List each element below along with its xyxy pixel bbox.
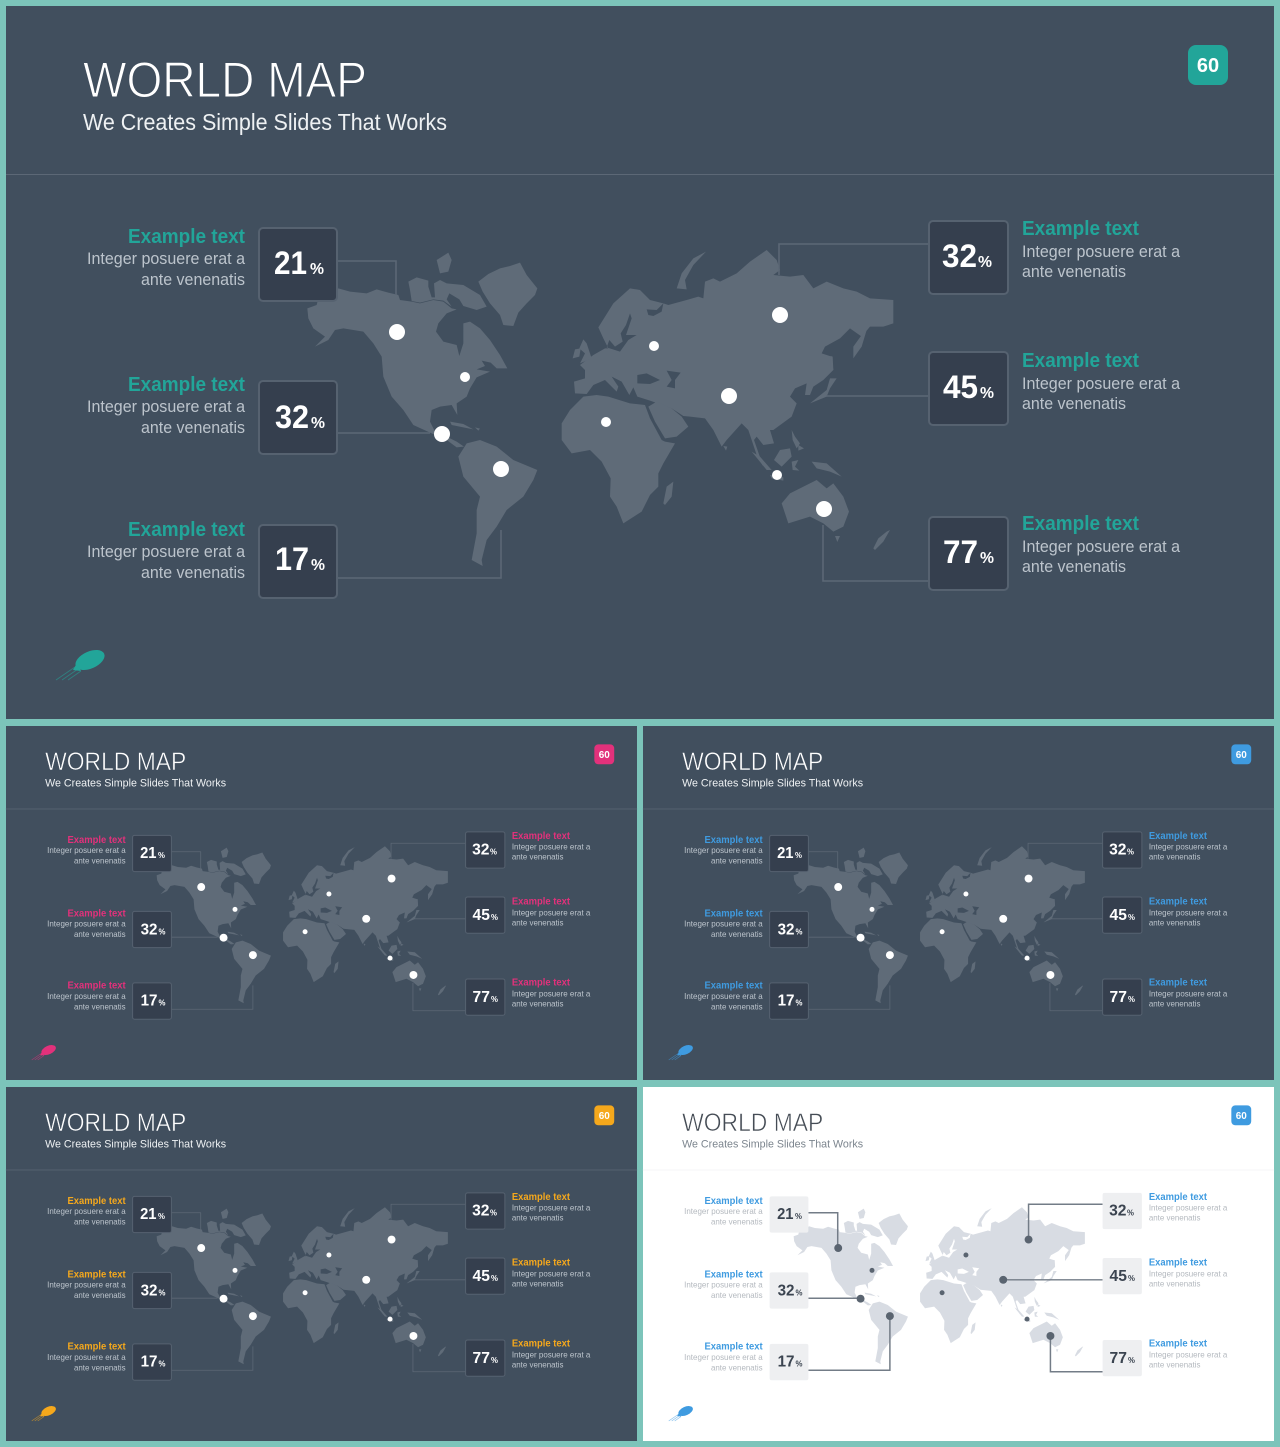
callout: left 32%: ante venenatis: [74, 929, 126, 939]
callout: right 32%: Integer posuere erat a: [512, 1203, 591, 1213]
callout: left 32%: 32: [778, 1283, 795, 1300]
callout: left 21%: %: [795, 1212, 802, 1221]
callout: right 77%: [929, 513, 1181, 590]
callout: right 77%: Integer posuere erat a: [1022, 537, 1181, 556]
callout: right 32%: [1103, 831, 1228, 868]
map location dots: [389, 307, 832, 517]
callout: right 77%: Example text: [1149, 977, 1208, 988]
callout: left 32%: [684, 908, 808, 948]
callout: left 32%: 32: [141, 1283, 158, 1300]
callout: left 32%: %: [158, 1289, 165, 1298]
callout: right 45%: [1103, 896, 1228, 933]
panel: blue slide: [643, 726, 1274, 1080]
callout: right 45%: [1103, 1257, 1228, 1294]
panel: main teal slide: [6, 6, 1274, 719]
callout: left 32%: [684, 1269, 808, 1309]
panel: orange slide: [6, 1087, 637, 1441]
callout: left 17%: Integer posuere erat a: [684, 991, 763, 1001]
callout: left 21%: 21: [274, 245, 307, 281]
callout: right 77%: Integer posuere erat a: [512, 988, 591, 998]
callout: right 45%: 45: [1110, 907, 1127, 924]
callout: right 32%: Integer posuere erat a: [1149, 842, 1228, 852]
callout: left 32%: Integer posuere erat a: [684, 1280, 763, 1290]
callout: left 17%: Example text: [128, 519, 245, 541]
badge: page number: [1231, 744, 1251, 764]
callout: right 45%: Example text: [1149, 896, 1208, 907]
callout: right 45%: ante venenatis: [512, 1278, 564, 1288]
callout: left 17%: Example text: [705, 980, 763, 991]
map location dots: [834, 875, 1054, 979]
callout: right 45%: 45: [473, 907, 490, 924]
callout: right 45%: Integer posuere erat a: [1149, 1268, 1228, 1278]
title: WORLD MAP: [83, 52, 367, 108]
callout: right 32%: ante venenatis: [1149, 852, 1201, 862]
callout: right 32%: 32: [1109, 1203, 1127, 1220]
callout: left 17%: Integer posuere erat a: [47, 1352, 126, 1362]
callout: left 17%: %: [795, 998, 802, 1007]
callout: left 17%: 17: [778, 1353, 795, 1370]
callout: left 32%: 32: [275, 399, 309, 435]
connector lines: [808, 1204, 1103, 1372]
callout: right 77%: Integer posuere erat a: [1149, 1349, 1228, 1359]
callout: right 45%: %: [980, 385, 994, 402]
callout: right 32%: Example text: [512, 1192, 571, 1203]
callout: left 17%: ante venenatis: [711, 1001, 763, 1011]
connector lines: [808, 843, 1103, 1011]
callout: left 17%: [87, 519, 337, 598]
callout: left 17%: 17: [275, 541, 309, 577]
callout: right 77%: [466, 1338, 591, 1376]
callout: right 77%: Example text: [512, 977, 571, 988]
callout: right 45%: Integer posuere erat a: [512, 907, 591, 917]
callout: right 77%: [466, 977, 591, 1015]
callout: left 21%: Integer posuere erat a: [47, 845, 126, 855]
callout: right 32%: %: [978, 254, 992, 271]
world map: [157, 846, 448, 1003]
callout: right 45%: ante venenatis: [1149, 917, 1201, 927]
callout: right 45%: [466, 1257, 591, 1294]
callout: right 77%: ante venenatis: [1149, 998, 1201, 1008]
map location dots: [197, 1236, 417, 1340]
callout: left 21%: %: [158, 1212, 165, 1221]
callout: right 32%: ante venenatis: [512, 1213, 564, 1223]
panel: pink slide: [6, 726, 637, 1080]
subtitle: We Creates Simple Slides That Works: [83, 109, 447, 135]
callout: left 32%: [87, 374, 337, 454]
icon: rocket: [32, 1043, 57, 1060]
callout: right 45%: Integer posuere erat a: [1022, 374, 1181, 393]
callout: left 21%: [684, 835, 808, 872]
title: WORLD MAP: [45, 749, 186, 776]
callout: right 77%: %: [1128, 995, 1135, 1004]
badge: page number: 60: [1197, 55, 1219, 77]
callout: right 77%: 77: [943, 534, 978, 570]
callout: left 17%: 17: [141, 992, 158, 1009]
callout: right 32%: Example text: [512, 831, 571, 842]
callout: left 21%: ante venenatis: [74, 1217, 126, 1227]
callout: left 21%: Example text: [128, 226, 245, 248]
callout: right 32%: [1103, 1192, 1228, 1229]
callout: right 32%: ante venenatis: [512, 852, 564, 862]
callout: left 17%: Example text: [68, 980, 126, 991]
subtitle: We Creates Simple Slides That Works: [682, 1139, 863, 1151]
callout: left 21%: 21: [777, 1206, 794, 1223]
map location dots: [834, 1236, 1054, 1340]
callout: right 32%: Example text: [1022, 218, 1139, 240]
callout: left 32%: Example text: [128, 374, 245, 396]
world map: [307, 250, 893, 566]
callout: left 32%: %: [795, 1289, 802, 1298]
callout: right 45%: ante venenatis: [512, 917, 564, 927]
callout: left 32%: Example text: [68, 1269, 126, 1280]
callout: right 77%: [1103, 977, 1228, 1015]
badge: page number: [594, 1105, 614, 1125]
callout: left 32%: Example text: [68, 908, 126, 919]
callout: left 21%: ante venenatis: [711, 1217, 763, 1227]
subtitle: We Creates Simple Slides That Works: [45, 1139, 226, 1151]
callout: left 32%: ante venenatis: [141, 418, 245, 437]
callout: right 32%: Example text: [1149, 1192, 1208, 1203]
badge: page number: [594, 744, 614, 764]
callout: right 32%: %: [490, 848, 497, 857]
callout: right 77%: 77: [473, 989, 490, 1006]
callout: left 17%: [684, 980, 808, 1019]
badge: page number: [1231, 1105, 1251, 1125]
callout: left 21%: Integer posuere erat a: [684, 845, 763, 855]
callout: right 32%: 32: [942, 238, 977, 274]
subtitle: We Creates Simple Slides That Works: [45, 778, 226, 790]
callout: right 77%: ante venenatis: [1149, 1359, 1201, 1369]
connector lines: [171, 1204, 466, 1372]
callout: right 45%: 45: [943, 369, 978, 405]
callout: left 21%: Example text: [68, 1196, 126, 1207]
callout: right 45%: Example text: [1022, 350, 1139, 372]
callout: left 21%: %: [795, 851, 802, 860]
callout: right 32%: %: [1127, 1209, 1134, 1218]
callout: left 32%: %: [311, 415, 325, 432]
callout: left 17%: %: [795, 1359, 802, 1368]
callout: right 32%: ante venenatis: [1022, 262, 1126, 281]
callout: left 32%: Integer posuere erat a: [47, 1280, 126, 1290]
callout: right 32%: %: [1127, 848, 1134, 857]
callout: right 77%: Example text: [1022, 513, 1139, 535]
callout: left 17%: ante venenatis: [74, 1362, 126, 1372]
title: WORLD MAP: [45, 1110, 186, 1137]
callout: left 21%: Integer posuere erat a: [684, 1206, 763, 1216]
callout: right 45%: 45: [473, 1268, 490, 1285]
callout: right 45%: Example text: [512, 1257, 571, 1268]
callout: right 77%: ante venenatis: [1022, 557, 1126, 576]
callout: right 32%: Example text: [1149, 831, 1208, 842]
callout: right 45%: %: [1128, 1274, 1135, 1283]
badge: page number: 60: [599, 750, 610, 761]
callout: left 32%: Integer posuere erat a: [47, 919, 126, 929]
callout: left 32%: ante venenatis: [711, 1290, 763, 1300]
callout: left 32%: 32: [141, 922, 158, 939]
callout: left 17%: 17: [778, 992, 795, 1009]
icon: rocket: [32, 1404, 57, 1421]
callout: left 21%: %: [310, 261, 324, 278]
callout: right 45%: ante venenatis: [1149, 1278, 1201, 1288]
world map: [794, 846, 1085, 1003]
callout: right 45%: %: [491, 1274, 498, 1283]
callout: right 77%: Example text: [1149, 1338, 1208, 1349]
callout: right 77%: %: [491, 1356, 498, 1365]
callout: left 21%: [684, 1196, 808, 1233]
callout: left 17%: [684, 1341, 808, 1380]
callout: left 32%: %: [158, 928, 165, 937]
callout: right 32%: [466, 1192, 591, 1229]
callout: left 17%: %: [158, 998, 165, 1007]
callout: right 45%: %: [1128, 913, 1135, 922]
callout: left 21%: Integer posuere erat a: [47, 1206, 126, 1216]
callout: left 32%: Example text: [705, 908, 763, 919]
callout: left 17%: ante venenatis: [141, 563, 245, 582]
callout: left 21%: Example text: [705, 835, 763, 846]
callout: left 17%: Example text: [68, 1341, 126, 1352]
callout: right 45%: Integer posuere erat a: [1149, 907, 1228, 917]
callout: left 32%: %: [795, 928, 802, 937]
callout: right 32%: 32: [472, 1203, 490, 1220]
callout: left 32%: Example text: [705, 1269, 763, 1280]
callout: left 17%: Integer posuere erat a: [684, 1352, 763, 1362]
badge: page number: 60: [1236, 750, 1247, 761]
map location dots: [197, 875, 417, 979]
callout: left 21%: 21: [140, 845, 157, 862]
callout: right 77%: %: [1128, 1356, 1135, 1365]
panel: white slide: [643, 1087, 1274, 1441]
callout: left 32%: Integer posuere erat a: [87, 397, 246, 416]
callout: left 21%: Integer posuere erat a: [87, 249, 246, 268]
callout: right 32%: 32: [1109, 842, 1127, 859]
title: WORLD MAP: [682, 749, 823, 776]
callout: left 32%: 32: [778, 922, 795, 939]
callout: right 32%: [466, 831, 591, 868]
world map: [157, 1207, 448, 1364]
callout: right 32%: %: [490, 1209, 497, 1218]
connector lines: [171, 843, 466, 1011]
callout: left 21%: Example text: [68, 835, 126, 846]
callout: right 32%: ante venenatis: [1149, 1213, 1201, 1223]
callout: right 45%: Integer posuere erat a: [512, 1268, 591, 1278]
badge: page number: 60: [1236, 1111, 1247, 1122]
callout: left 17%: [47, 980, 171, 1019]
callout: left 32%: Integer posuere erat a: [684, 919, 763, 929]
callout: left 21%: Example text: [705, 1196, 763, 1207]
callout: right 32%: Integer posuere erat a: [1022, 242, 1181, 261]
badge: page number: [1188, 45, 1228, 85]
callout: right 45%: ante venenatis: [1022, 394, 1126, 413]
callout: left 32%: [47, 1269, 171, 1309]
callout: left 17%: Integer posuere erat a: [87, 542, 246, 561]
callout: left 21%: 21: [140, 1206, 157, 1223]
callout: right 77%: ante venenatis: [512, 998, 564, 1008]
callout: right 45%: [929, 350, 1181, 425]
connector lines: [337, 244, 929, 581]
callout: right 77%: Example text: [512, 1338, 571, 1349]
callout: left 17%: %: [311, 557, 325, 574]
callout: left 21%: [47, 1196, 171, 1233]
callout: left 17%: Example text: [705, 1341, 763, 1352]
icon: rocket: [669, 1043, 694, 1060]
callout: left 21%: [47, 835, 171, 872]
icon: rocket: [56, 646, 108, 680]
callout: left 21%: [87, 226, 337, 301]
callout: left 17%: ante venenatis: [74, 1001, 126, 1011]
callout: left 21%: ante venenatis: [711, 856, 763, 866]
callout: right 32%: [929, 218, 1181, 294]
callout: left 32%: ante venenatis: [74, 1290, 126, 1300]
callout: right 45%: [466, 896, 591, 933]
callout: right 77%: %: [491, 995, 498, 1004]
world map: [794, 1207, 1085, 1364]
callout: right 77%: ante venenatis: [512, 1359, 564, 1369]
callout: left 17%: Integer posuere erat a: [47, 991, 126, 1001]
callout: left 32%: [47, 908, 171, 948]
callout: left 17%: 17: [141, 1353, 158, 1370]
callout: right 77%: Integer posuere erat a: [1149, 988, 1228, 998]
callout: right 77%: %: [980, 550, 994, 567]
callout: right 77%: 77: [1110, 1350, 1127, 1367]
callout: right 45%: 45: [1110, 1268, 1127, 1285]
callout: left 21%: ante venenatis: [74, 856, 126, 866]
callout: left 32%: ante venenatis: [711, 929, 763, 939]
badge: page number: 60: [599, 1111, 610, 1122]
callout: left 21%: %: [158, 851, 165, 860]
callout: left 17%: ante venenatis: [711, 1362, 763, 1372]
callout: right 32%: Integer posuere erat a: [1149, 1203, 1228, 1213]
callout: right 77%: Integer posuere erat a: [512, 1349, 591, 1359]
callout: right 45%: Example text: [1149, 1257, 1208, 1268]
callout: right 77%: 77: [473, 1350, 490, 1367]
title: WORLD MAP: [682, 1110, 823, 1137]
callout: right 45%: %: [491, 913, 498, 922]
callout: right 77%: 77: [1110, 989, 1127, 1006]
callout: right 32%: Integer posuere erat a: [512, 842, 591, 852]
subtitle: We Creates Simple Slides That Works: [682, 778, 863, 790]
callout: left 21%: 21: [777, 845, 794, 862]
callout: right 32%: 32: [472, 842, 490, 859]
icon: rocket: [669, 1404, 694, 1421]
callout: left 17%: %: [158, 1359, 165, 1368]
callout: left 21%: ante venenatis: [141, 270, 245, 289]
callout: left 17%: [47, 1341, 171, 1380]
callout: right 77%: [1103, 1338, 1228, 1376]
callout: right 45%: Example text: [512, 896, 571, 907]
